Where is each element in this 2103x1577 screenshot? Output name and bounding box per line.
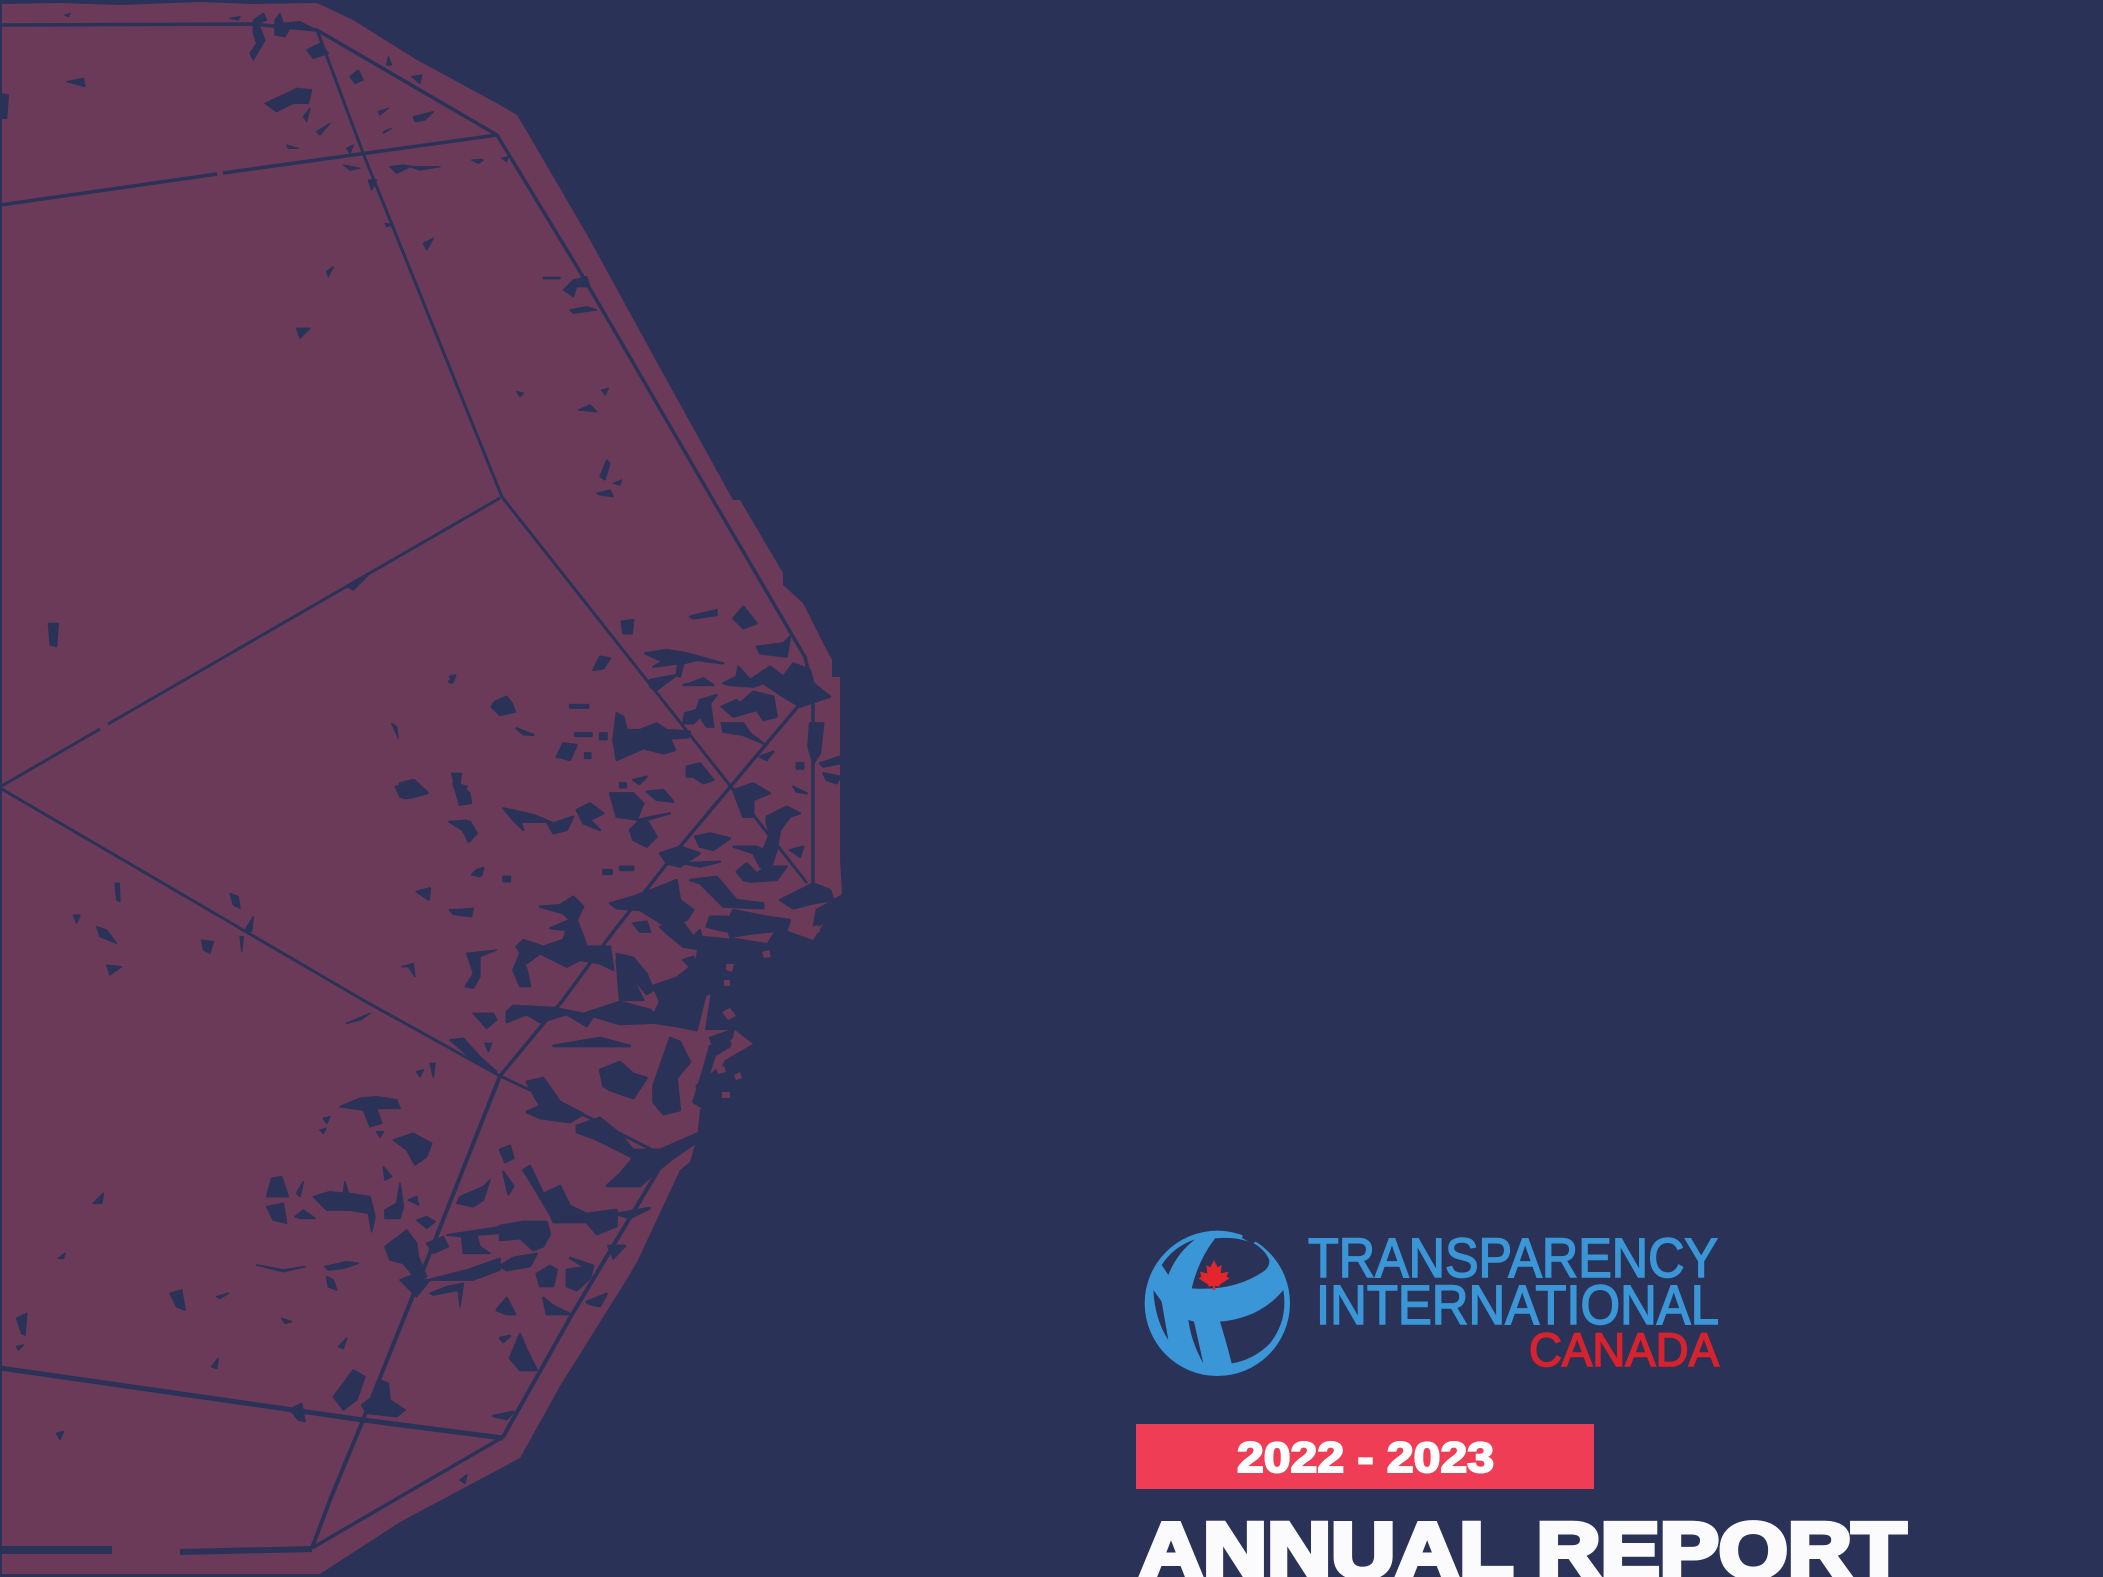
- polyhedron wireframe edges: [0, 0, 813, 1577]
- panel: distressed polyhedron graphic: [0, 0, 842, 1577]
- distress texture: lower right: [493, 954, 733, 1419]
- distress texture: top: [0, 13, 483, 338]
- banner background: [1136, 1424, 1594, 1489]
- icon: maple leaf: [1199, 1260, 1229, 1290]
- wordmark: Canada: CANADA: [1529, 1323, 1720, 1376]
- logo: Transparency International Canada: [1145, 1226, 1720, 1376]
- distress texture: right side: [400, 607, 840, 1000]
- year banner: [1136, 1424, 1594, 1489]
- distress texture: upper right: [473, 157, 622, 497]
- banner text: years: 2022 - 2023: [1237, 1434, 1494, 1482]
- polyhedron silhouette: [2, 2, 842, 1574]
- wordmark: Transparency: TRANSPARENCY: [1308, 1226, 1718, 1289]
- wordmark: International: INTERNATIONAL: [1316, 1273, 1719, 1336]
- distress texture: middle left: [48, 575, 500, 988]
- icon: globe: [1145, 1230, 1290, 1376]
- distress texture: lower left: [17, 1013, 500, 1483]
- loose fragments at crumbling edge: [716, 925, 820, 1098]
